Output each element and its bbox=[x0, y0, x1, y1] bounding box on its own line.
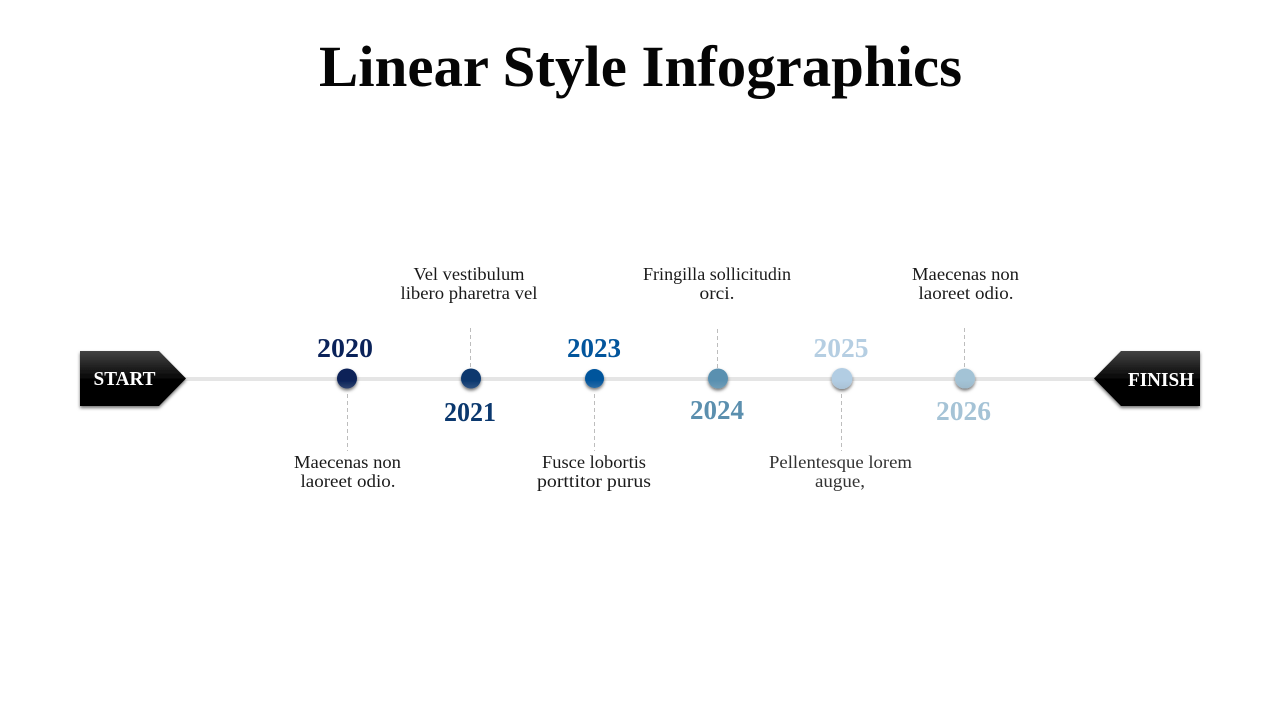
milestone 2020 bbox=[294, 333, 401, 491]
milestone 2026: Maecenas non bbox=[912, 264, 1019, 284]
milestone 2026 bbox=[912, 264, 1019, 426]
milestone 2020: laoreet odio. bbox=[300, 471, 396, 491]
milestone 2023 bbox=[537, 333, 651, 491]
milestone 2020: Maecenas non bbox=[294, 452, 401, 472]
timeline line bbox=[180, 377, 1100, 381]
milestone 2020: 2020 bbox=[317, 333, 373, 363]
milestone 2025: Pellentesque lorem bbox=[769, 452, 912, 472]
milestone 2021 bbox=[400, 264, 538, 427]
milestone 2021: Vel vestibulum bbox=[414, 264, 525, 284]
milestone 2023: 2023 bbox=[567, 333, 621, 363]
milestone 2025: augue, bbox=[815, 471, 865, 491]
title: Linear Style Infographics bbox=[319, 34, 962, 99]
milestone 2023: Fusce lobortis bbox=[542, 452, 646, 472]
milestone 2021: libero pharetra vel bbox=[400, 283, 538, 303]
milestone 2026: 2026 bbox=[936, 396, 991, 426]
milestone 2026: laoreet odio. bbox=[918, 283, 1014, 303]
finish arrow tag: FINISH bbox=[1128, 369, 1194, 391]
milestone 2024: Fringilla sollicitudin bbox=[643, 264, 791, 284]
milestone 2024 bbox=[643, 264, 791, 425]
start arrow tag: START bbox=[94, 368, 156, 390]
milestone 2024: orci. bbox=[700, 283, 734, 303]
milestone 2023: porttitor purus bbox=[537, 471, 651, 491]
start arrow tag bbox=[80, 351, 186, 406]
finish arrow tag bbox=[1094, 351, 1200, 406]
milestone 2021: 2021 bbox=[444, 397, 496, 427]
milestone 2025: 2025 bbox=[814, 333, 868, 363]
milestone 2025 bbox=[769, 333, 912, 491]
milestone 2024: 2024 bbox=[690, 395, 744, 425]
